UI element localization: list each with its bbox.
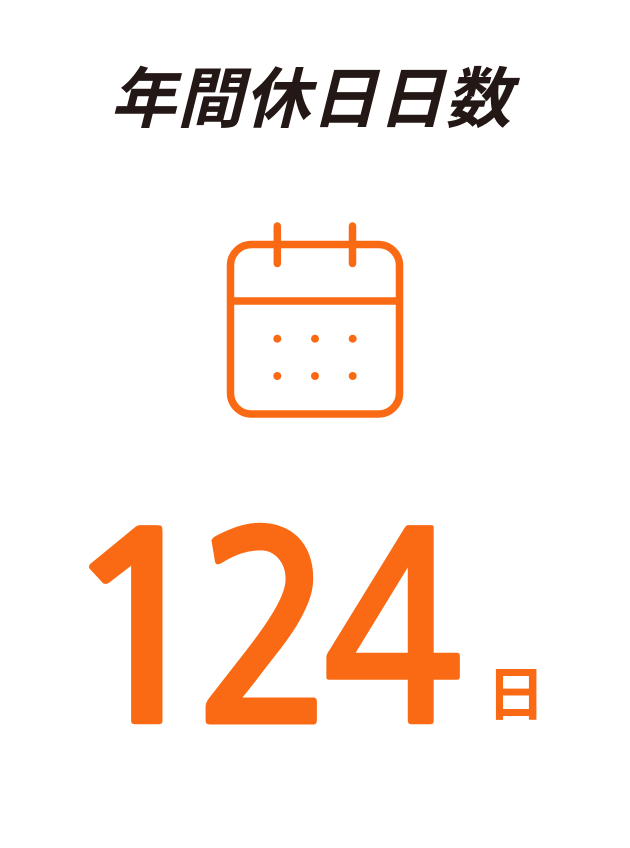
value: 124 days [51,503,545,763]
title: 年間休日日数 [110,62,520,136]
value: 124 days: 4 [320,503,467,763]
icon: calendar [230,226,400,414]
value: 124 days: 1 [51,504,229,763]
value: 124 days: 日 [487,648,545,732]
value: 124 days: 2 [192,503,339,763]
